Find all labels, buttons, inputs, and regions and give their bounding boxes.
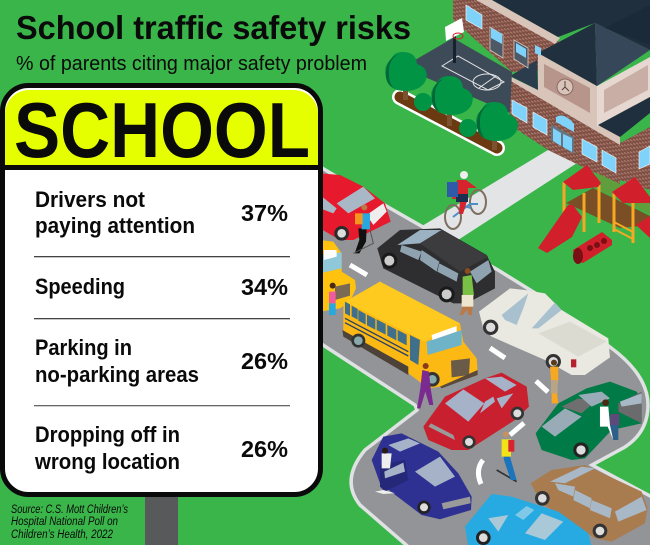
playground: [538, 165, 650, 264]
row 4: [34, 422, 288, 474]
pedestrians on road: [417, 360, 558, 408]
row 4: 26%: [241, 436, 288, 462]
sidewalk: [422, 150, 577, 240]
title: School traffic safety risks: [16, 9, 411, 46]
row 1: [35, 187, 288, 238]
school building: [453, 0, 650, 190]
school bus: [342, 282, 478, 388]
SCHOOL heading: SCHOOL: [14, 86, 310, 174]
source note: Hospital National Poll on: [11, 516, 118, 528]
red sedan: [423, 373, 529, 450]
row 1: 37%: [241, 200, 288, 226]
row 4: wrong location: [34, 449, 180, 474]
black SUV: [377, 228, 495, 303]
row 2: Speeding: [35, 274, 125, 299]
light blue car: [465, 494, 592, 545]
basketball court: [415, 18, 512, 113]
row 2: 34%: [241, 274, 288, 300]
pedestrian green shirt: [459, 268, 474, 315]
sign header: [5, 90, 318, 165]
subtitle: % of parents citing major safety problem: [16, 53, 367, 75]
sign post: [145, 495, 178, 545]
brown wagon: [531, 465, 648, 542]
red car top left: [320, 173, 391, 253]
row 3: [35, 335, 288, 387]
school sign: [2, 86, 320, 494]
road with curb: [300, 155, 650, 545]
source note: Source: C.S. Mott Children’s: [11, 504, 128, 516]
blue car: [372, 433, 472, 519]
yellow car behind bus: [320, 240, 356, 315]
pedestrian with scooter: [497, 431, 517, 482]
row 1: Drivers not: [35, 187, 146, 212]
row 3: Parking in: [35, 335, 132, 360]
row 3: no-parking areas: [35, 362, 199, 387]
row 4: Dropping off in: [35, 422, 180, 447]
row 2: [35, 274, 288, 300]
white pickup: [479, 288, 610, 375]
planter with trees: [385, 52, 518, 150]
green car: [536, 382, 642, 460]
source note: [11, 504, 128, 541]
row 1: paying attention: [35, 213, 195, 238]
source note: Children’s Health, 2022: [11, 529, 114, 541]
cyclist: [445, 171, 486, 229]
row 3: 26%: [241, 348, 288, 374]
